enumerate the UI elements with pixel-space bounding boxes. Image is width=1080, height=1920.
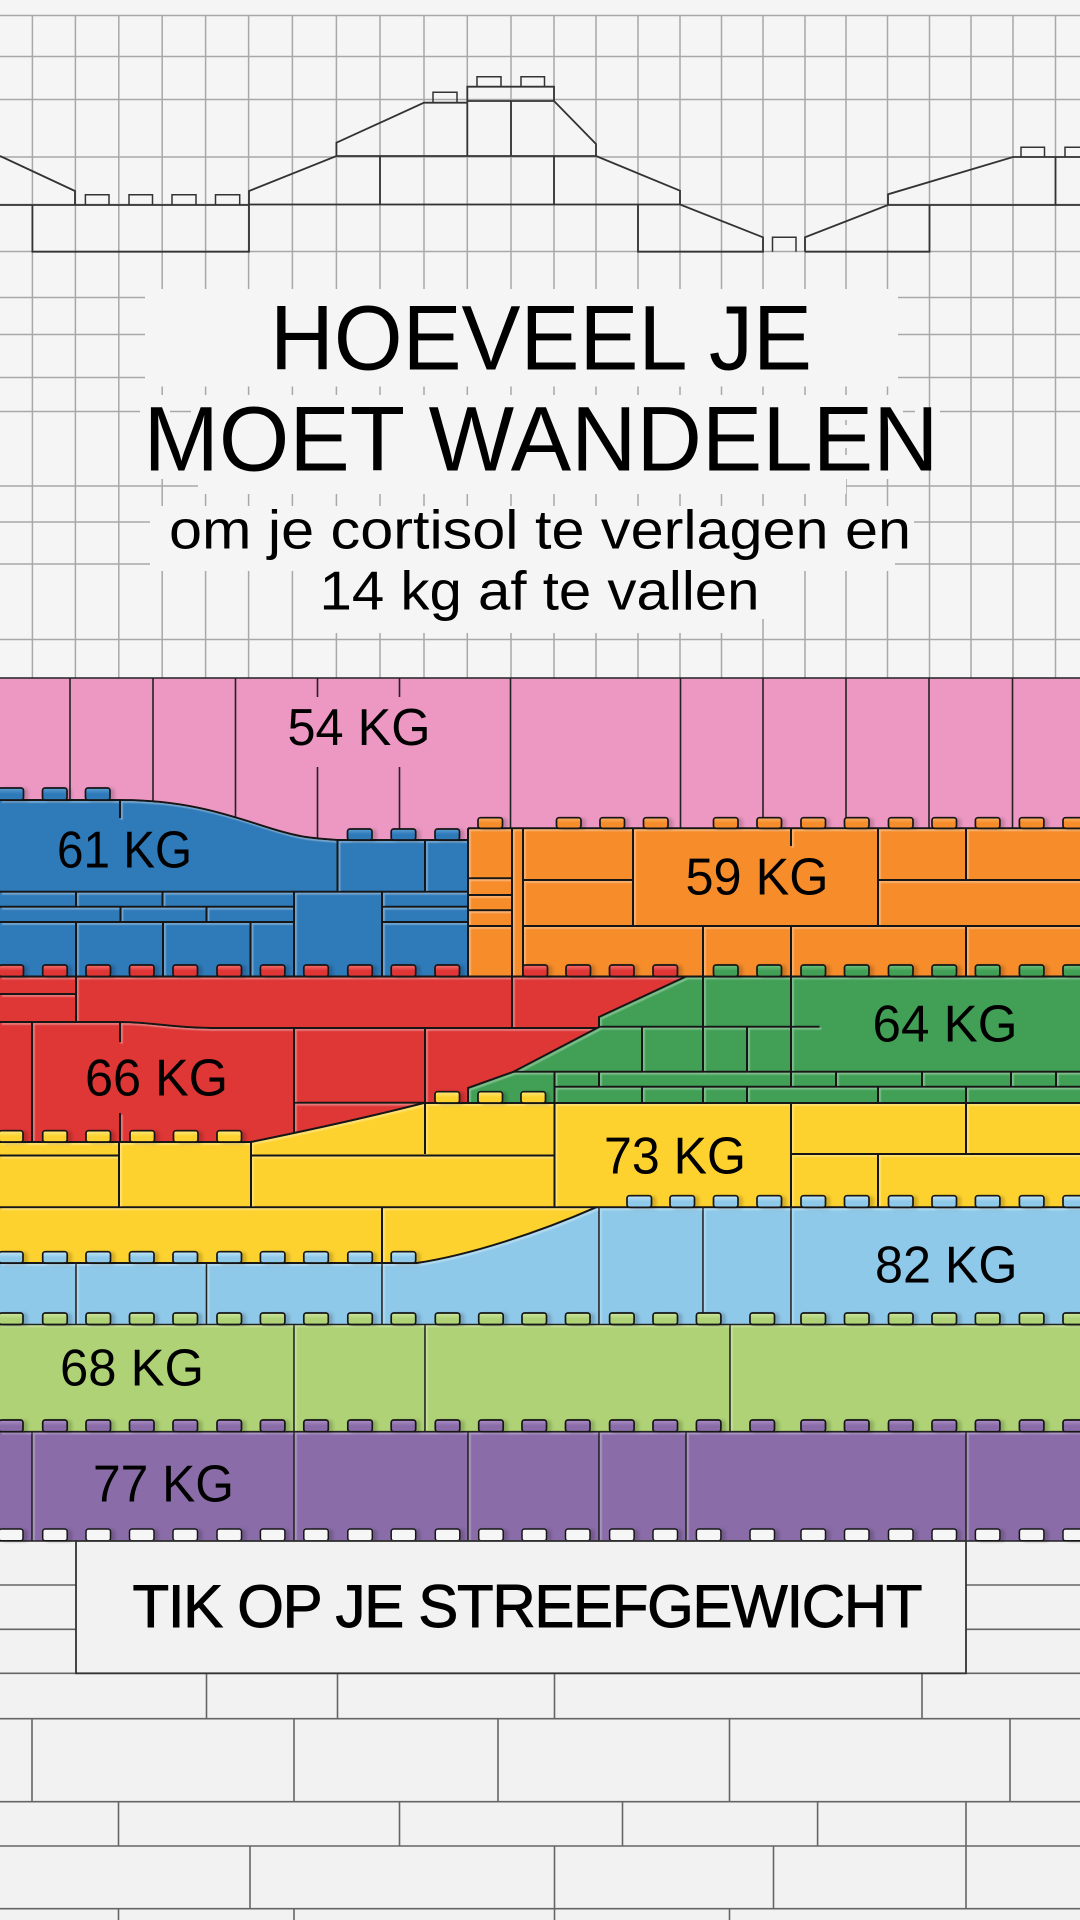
panel: 66 kg red bricks	[0, 965, 700, 1146]
title: MOET WANDELEN	[144, 389, 938, 491]
title: HOEVEEL JE	[270, 288, 812, 390]
panel: 54 kg pink bricks	[0, 678, 1080, 848]
panel: 82 kg light blue bricks: 82 KG	[875, 1236, 1018, 1294]
panel: 59 kg orange bricks	[468, 818, 1080, 977]
call to action box	[76, 1541, 966, 1673]
panel: 61 kg blue bricks: 61 KG	[57, 822, 192, 880]
panel: white brick wall	[0, 1529, 1080, 1920]
outline of stacked brick hills	[0, 77, 1080, 252]
panel: 73 kg yellow bricks: 73 KG	[604, 1127, 746, 1185]
panel: 66 kg red bricks: 66 KG	[85, 1050, 228, 1108]
panel: 54 kg pink bricks: 54 KG	[288, 699, 430, 757]
call to action box: TIK OP JE STREEFGEWICHT	[132, 1573, 922, 1640]
panel: 77 kg purple bricks: 77 KG	[93, 1456, 234, 1514]
panel: 64 kg green bricks: 64 KG	[872, 996, 1018, 1054]
panel: 64 kg green bricks	[468, 965, 1080, 1103]
panel: 68 kg lime bricks	[0, 1313, 1080, 1432]
subtitle: 14 kg af te vallen	[320, 559, 760, 621]
subtitle: om je cortisol te verlagen en	[169, 498, 911, 560]
panel: 61 kg blue bricks	[0, 788, 468, 977]
title	[144, 288, 938, 491]
panel: 59 kg orange bricks: 59 KG	[686, 849, 828, 907]
subtitle	[169, 498, 911, 621]
panel: 77 kg purple bricks	[0, 1420, 1080, 1542]
panel: 82 kg light blue bricks	[0, 1196, 1080, 1325]
panel: 73 kg yellow bricks	[0, 1092, 1080, 1266]
panel: 68 kg lime bricks: 68 KG	[60, 1340, 204, 1398]
